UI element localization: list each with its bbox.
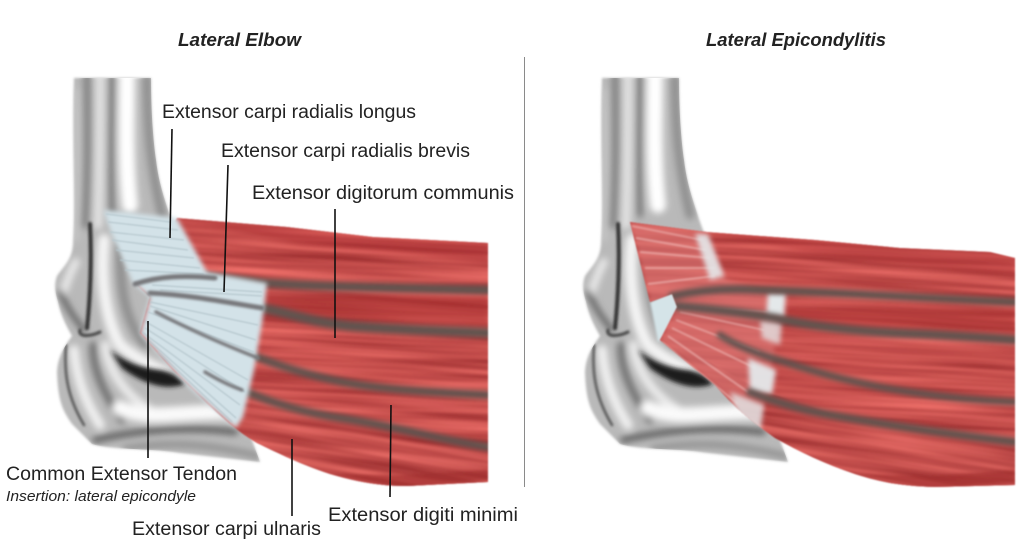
panel: lateral elbow	[6, 32, 517, 539]
elbow bones	[583, 70, 788, 462]
divider line	[524, 57, 526, 487]
heading: Lateral Epicondylitis: Lateral Epicondylitis	[706, 30, 886, 50]
label: extensor carpi radialis longus: Extensor carpi radialis longus	[162, 102, 416, 123]
label: common extensor tendon: Common Extensor Tendon	[6, 464, 237, 485]
extensor muscle group with inflamed tendon	[629, 221, 1016, 488]
label: extensor carpi radialis brevis: Extensor carpi radialis brevis	[221, 141, 470, 162]
extensor muscle group	[138, 217, 490, 488]
panel: lateral epicondylitis	[582, 32, 1016, 488]
label: extensor carpi radialis brevis	[221, 141, 470, 292]
scar patches in tendon	[695, 234, 786, 435]
frayed fibres	[632, 226, 768, 410]
heading: Lateral Elbow: Lateral Elbow	[178, 30, 302, 50]
label: extensor carpi ulnaris: Extensor carpi ulnaris	[132, 519, 321, 540]
pink inflamed tendon area	[631, 222, 776, 407]
common extensor tendon	[103, 210, 267, 428]
elbow bones	[55, 70, 260, 462]
label: extensor digiti minimi: Extensor digiti minimi	[328, 505, 518, 526]
label: common extensor tendon	[6, 321, 237, 505]
label: common extensor tendon: Insertion: lateral epicondyle	[6, 489, 196, 505]
label: extensor digitorum communis: Extensor digitorum communis	[252, 183, 514, 204]
exposed pale epicondyle	[650, 292, 680, 342]
